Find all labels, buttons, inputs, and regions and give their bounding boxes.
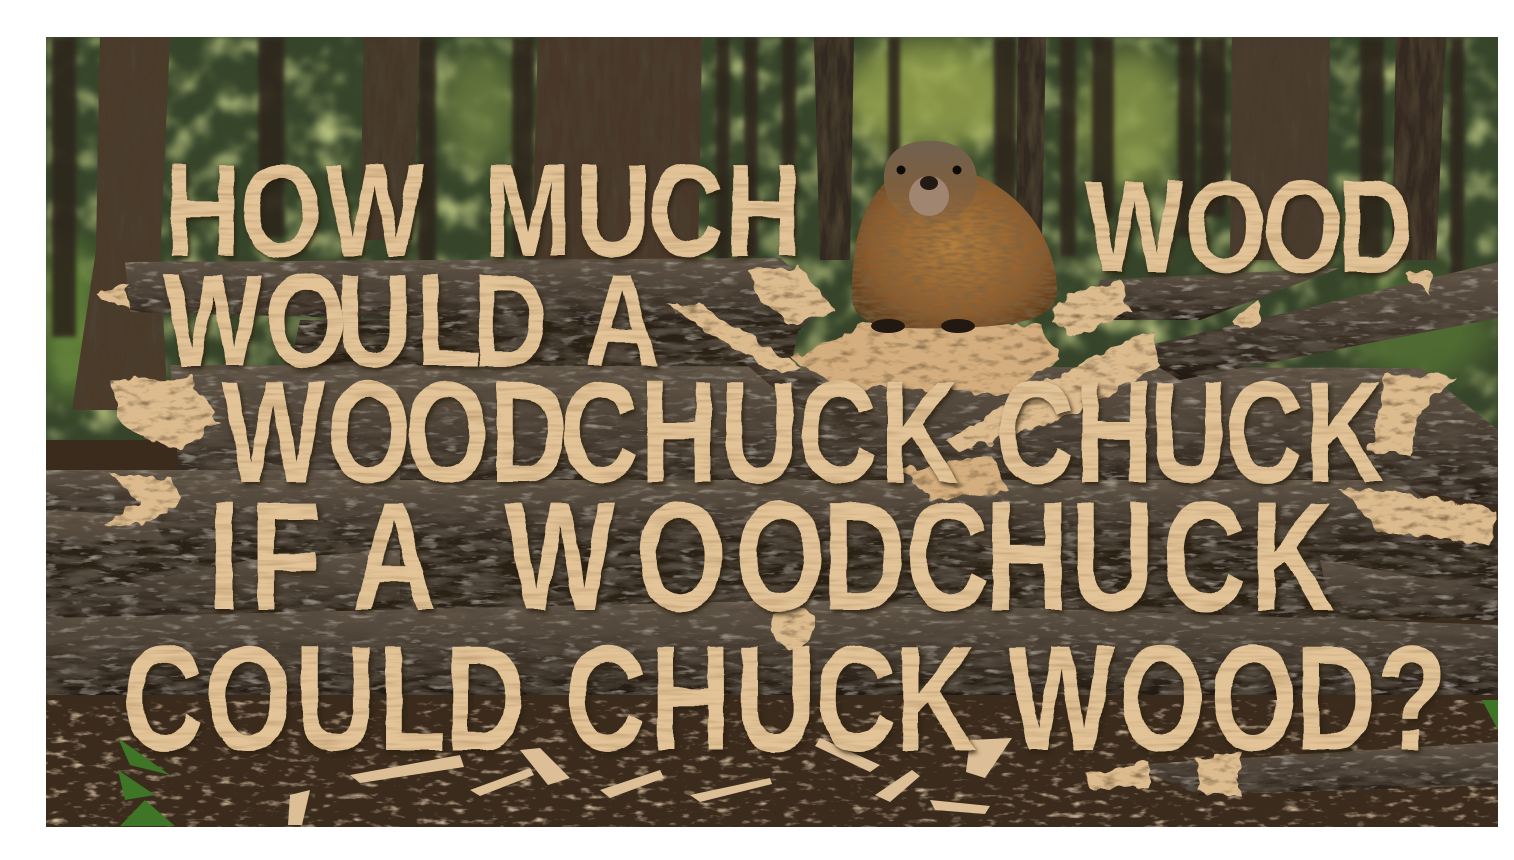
forest floor [46,440,1498,827]
forest background [46,37,1498,440]
line 1: WOOD: WOOD [1085,154,1414,301]
line 1: HOW MUCH: HOWMUCH [165,138,802,285]
green seedling [118,700,1498,826]
groundhog eyes [896,166,962,174]
groundhog [852,141,1057,333]
line 2: WOULD A: WOULDA [163,248,660,395]
stacked logs [46,258,1498,795]
wooden letter title [122,138,1446,783]
groundhog paws [871,319,975,333]
distant tree trunks [52,37,1464,337]
ground wood chips [288,738,1012,825]
groundhog nose [920,176,938,190]
line 5: COULD CHUCK WOOD?: COULDCHUCKWOOD? [122,615,1446,783]
groundhog muzzle [909,176,949,216]
groundhog body [852,165,1057,328]
line 4: IF A WOODCHUCK: IFAWOODCHUCK [208,470,1335,644]
near tree trunks [72,37,1446,410]
broken pale log ends [95,268,1496,795]
line 3: WOODCHUCK CHUCK: WOODCHUCKCHUCK [222,352,1384,514]
groundhog head [884,141,977,224]
wood chip pile [790,325,1060,500]
